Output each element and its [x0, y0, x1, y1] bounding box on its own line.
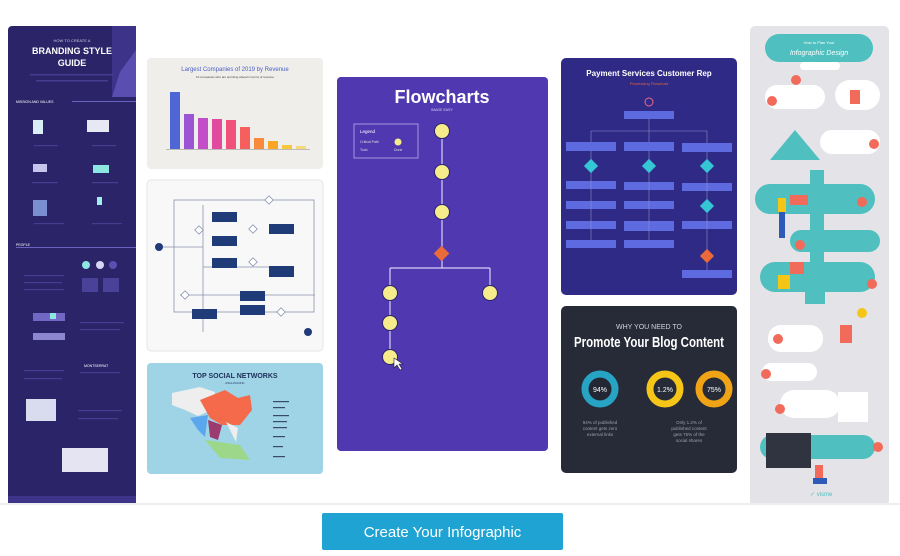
panel: top social networks map: ASIA-PACIFIC — [225, 381, 246, 385]
legend: Done — [394, 148, 402, 152]
legend — [354, 124, 418, 158]
button: create your infographic — [322, 513, 563, 550]
flow diagram — [382, 124, 498, 370]
map heading: TOP SOCIAL NETWORKS — [192, 373, 278, 380]
legend: Legend — [360, 129, 376, 134]
panel: branding style guide: MONTSERRAT — [84, 364, 109, 368]
panel: promote your blog content: published content — [671, 426, 707, 431]
heading: branding: BRANDING STYLE — [32, 46, 112, 56]
panel: flowcharts — [337, 77, 548, 451]
legend: Todo — [360, 148, 368, 152]
panel: payment services customer rep: Processing Flowchart — [630, 81, 669, 86]
panel: how to plan infographic design: Infographic Design — [790, 50, 848, 57]
panel: bar chart largest companies: 10 companies who are sprinting ahead in terms of revenue — [196, 75, 274, 79]
illustration figures — [778, 90, 867, 484]
panel: promote your blog content — [561, 306, 737, 473]
bottom bar — [0, 504, 900, 556]
map — [172, 387, 252, 460]
promote heading: WHY YOU NEED TO — [616, 324, 683, 331]
panel: flowcharts: IMAGE EASY — [431, 108, 453, 112]
panel: promote your blog content: Only 1.2% of — [676, 420, 703, 425]
donut 1.2% — [650, 374, 680, 404]
panel: branding style guide: MISSION AND VALUES — [16, 100, 54, 104]
button: create your infographic: Create Your Infographic — [364, 524, 522, 541]
panel: promote your blog content: 94% of published — [583, 420, 618, 425]
panel: promote your blog content: gets 75% of the — [673, 432, 705, 437]
panel: how to plan infographic design: How to Plan Your — [804, 40, 835, 45]
panel: process flow diagram — [147, 180, 323, 351]
payment title: Payment Services Customer Rep — [586, 69, 712, 78]
heading: branding: GUIDE — [58, 58, 86, 68]
panel: branding style guide — [8, 26, 136, 506]
chart title: Largest Companies of 2019 by Revenue — [181, 67, 289, 73]
panel: payment services customer rep — [561, 58, 737, 295]
heading: branding: HOW TO CREATE A — [54, 38, 91, 43]
panel: promote your blog content: external links — [587, 432, 614, 437]
donut 1.2%: 1.2% — [657, 387, 673, 394]
donut 94%: 94% — [593, 387, 607, 394]
flowcharts title: Flowcharts — [394, 87, 490, 107]
panel: promote your blog content: Promote Your Blog Content — [574, 334, 724, 351]
bar chart — [166, 92, 310, 150]
panel: top social networks map — [147, 363, 323, 474]
panel: how to plan infographic design: ✓ visme — [810, 492, 833, 498]
panel: branding style guide: PEOPLE — [16, 243, 31, 247]
panel: promote your blog content: social shares — [676, 438, 703, 443]
donut 75% — [699, 374, 729, 404]
donut 75%: 75% — [707, 387, 721, 394]
person icon — [645, 98, 653, 106]
donut 94% — [585, 374, 615, 404]
legend: Critical Path — [360, 140, 379, 144]
panel: promote your blog content: content gets zero — [583, 426, 618, 431]
panel: how to plan infographic design — [750, 26, 889, 506]
heading: branding — [32, 38, 112, 68]
panel: bar chart largest companies — [147, 58, 323, 169]
